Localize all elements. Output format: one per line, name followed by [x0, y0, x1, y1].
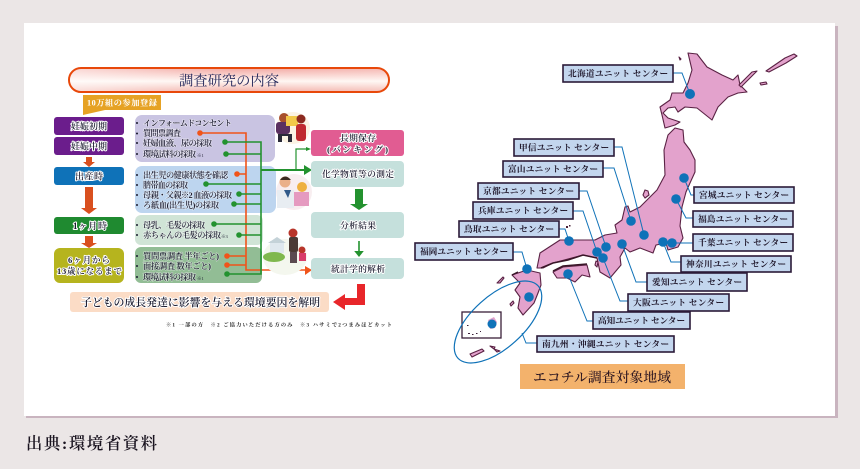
- callout: 100,000 pairs: [83, 95, 161, 115]
- stage: six months to 13 years: 6ヶ月から: [68, 255, 110, 265]
- leader lines: [513, 73, 694, 343]
- Okinawa inset box: [462, 312, 501, 338]
- map title: エコチル調査対象地域: [533, 369, 671, 385]
- connector lines: green path: [203, 139, 312, 277]
- label: Aichi: 愛知ユニット センター: [652, 276, 742, 287]
- arrow: to statistical analysis: [354, 241, 364, 257]
- stage: six months to 13 years: 13歳になるまで: [57, 266, 122, 276]
- label: Hyogo: [473, 202, 573, 219]
- callout: 100,000 pairs: 10万組の参加登録: [87, 98, 158, 108]
- label: South Kyushu and Okinawa: [537, 336, 674, 352]
- source line: 出典:環境省資料: [26, 434, 158, 453]
- label: Fukushima: [693, 211, 793, 227]
- panel: follow-up items: ※1: [197, 276, 204, 281]
- label: Fukuoka: [415, 243, 513, 260]
- label: Hyogo: 兵庫ユニット センター: [478, 204, 568, 216]
- arrow: to birth: [83, 157, 95, 167]
- panel: one month items: ※3: [221, 234, 228, 239]
- label: Tottori: 鳥取ユニット センター: [464, 223, 554, 234]
- connector lines: orange path: [197, 130, 312, 275]
- panel: one month items: 母乳、毛髪の採取: [143, 220, 206, 230]
- box: long-term storage: (バンキング): [327, 144, 388, 154]
- label: Kyoto: 京都ユニット センター: [483, 185, 574, 196]
- panel: pregnancy items: [135, 115, 275, 162]
- panel: pregnancy items: 質問票調査: [143, 128, 182, 138]
- stage: birth: 出産時: [75, 170, 103, 182]
- panel: birth items: 母親・父親※2 血液の採取: [143, 190, 233, 200]
- arrow: to six months: [81, 236, 97, 248]
- panel: one month items: [135, 215, 263, 245]
- stage: early pregnancy: 妊娠初期: [71, 120, 107, 132]
- icon: doctor clip art: [276, 174, 312, 210]
- label: Chiba: [693, 234, 793, 251]
- unit center location dots: [488, 89, 695, 328]
- label: Chiba: 千葉ユニット センター: [698, 236, 788, 248]
- label: Toyama: [503, 161, 603, 177]
- label: Miyagi: [694, 187, 794, 203]
- box: chemical measurement: 化学物質等の測定: [322, 168, 394, 179]
- label: Kochi: 高知ユニット センター: [598, 314, 685, 326]
- white panel: [24, 23, 838, 418]
- box: analysis results: [311, 212, 404, 238]
- label: Osaka: [628, 294, 729, 311]
- banner: conclusion: [70, 292, 329, 312]
- label: Kyoto: [478, 183, 579, 199]
- arrow: to one month: [81, 187, 97, 214]
- panel: birth items: ろ紙血(出生児)の採取: [143, 200, 220, 210]
- title: research content: 調査研究の内容: [179, 72, 279, 90]
- label: Koshin: 甲信ユニット センター: [519, 142, 609, 152]
- map of Japan: [470, 53, 797, 357]
- arrow: to conclusion: [333, 284, 365, 310]
- panel: follow-up items: 環境試料の採取: [143, 272, 197, 282]
- southern Kyushu and Okinawa ellipse: [440, 267, 556, 377]
- label: Kanagawa: 神奈川ユニット センター: [686, 258, 786, 269]
- stage: one month: [54, 217, 124, 234]
- label: Koshin: [514, 139, 614, 156]
- northern islands: [739, 54, 797, 87]
- box: analysis results: 分析結果: [340, 220, 376, 230]
- Shikoku: [553, 265, 590, 282]
- stage: six months to 13 years: [54, 248, 124, 283]
- box: statistical analysis: [311, 258, 404, 279]
- stage: early pregnancy: [54, 117, 124, 135]
- box: chemical measurement: [311, 161, 404, 187]
- label: Osaka: 大阪ユニット センター: [633, 296, 724, 308]
- panel: pregnancy items: 妊婦血液、尿の採取: [143, 138, 213, 148]
- panel: follow-up items: 質問票調査 半年ごと): [143, 251, 219, 261]
- box: long-term storage: [311, 130, 404, 156]
- panel: pregnancy items: ※1: [197, 153, 204, 158]
- stage: mid pregnancy: [54, 137, 124, 155]
- Hokkaido: [660, 53, 747, 128]
- Inland Sea coast: [512, 255, 597, 275]
- label: Kochi: [593, 312, 690, 329]
- stage: one month: 1ヶ月時: [73, 220, 107, 231]
- footnote: ※1 一部の方 ※2 ご協力いただける方のみ ※3 ハサミで2つまみほどカット: [166, 320, 392, 328]
- panel: birth items: [135, 166, 276, 213]
- Honshu: [537, 128, 695, 278]
- label: Fukuoka: 福岡ユニット センター: [420, 246, 508, 256]
- panel: birth items: 臍帯血の採取: [143, 180, 189, 190]
- label: Toyama: 富山ユニット センター: [508, 163, 598, 174]
- box: long-term storage: 長期保存: [340, 132, 376, 143]
- box: statistical analysis: 統計学的解析: [331, 263, 385, 274]
- banner: conclusion: 子どもの成長発達に影響を与える環境要因を解明: [81, 295, 320, 309]
- label: Hokkaido: 北海道ユニット センター: [568, 68, 668, 78]
- arrow: to analysis results: [350, 189, 368, 210]
- label: Aichi: [647, 273, 747, 291]
- icon: family clip art: [276, 112, 310, 144]
- panel: pregnancy items: 環境試料の採取: [143, 149, 197, 159]
- stage: birth: [54, 167, 124, 185]
- label: Fukushima: 福島ユニット センター: [698, 213, 788, 224]
- label: South Kyushu and Okinawa: 南九州・沖縄ユニット センター: [542, 338, 669, 349]
- label: Tottori: [459, 221, 559, 237]
- panel: follow-up items: [135, 247, 262, 283]
- panel: birth items: 出生児の健康状態を確認: [143, 170, 229, 180]
- panel: follow-up items: 面接調査 数年ごと): [143, 261, 211, 271]
- map title: [520, 364, 685, 389]
- label: Hokkaido: [563, 65, 673, 82]
- stage: mid pregnancy: 妊娠中期: [71, 140, 107, 152]
- Kyushu: [512, 270, 541, 315]
- label: Kanagawa: [681, 256, 791, 272]
- panel: one month items: 赤ちゃんの毛髪の採取: [143, 230, 222, 240]
- label: Miyagi: 宮城ユニット センター: [699, 189, 789, 200]
- icon: mother, child and house clip art: [263, 228, 307, 275]
- title: research content: [69, 68, 389, 92]
- panel: pregnancy items: インフォームドコンセント: [143, 119, 232, 128]
